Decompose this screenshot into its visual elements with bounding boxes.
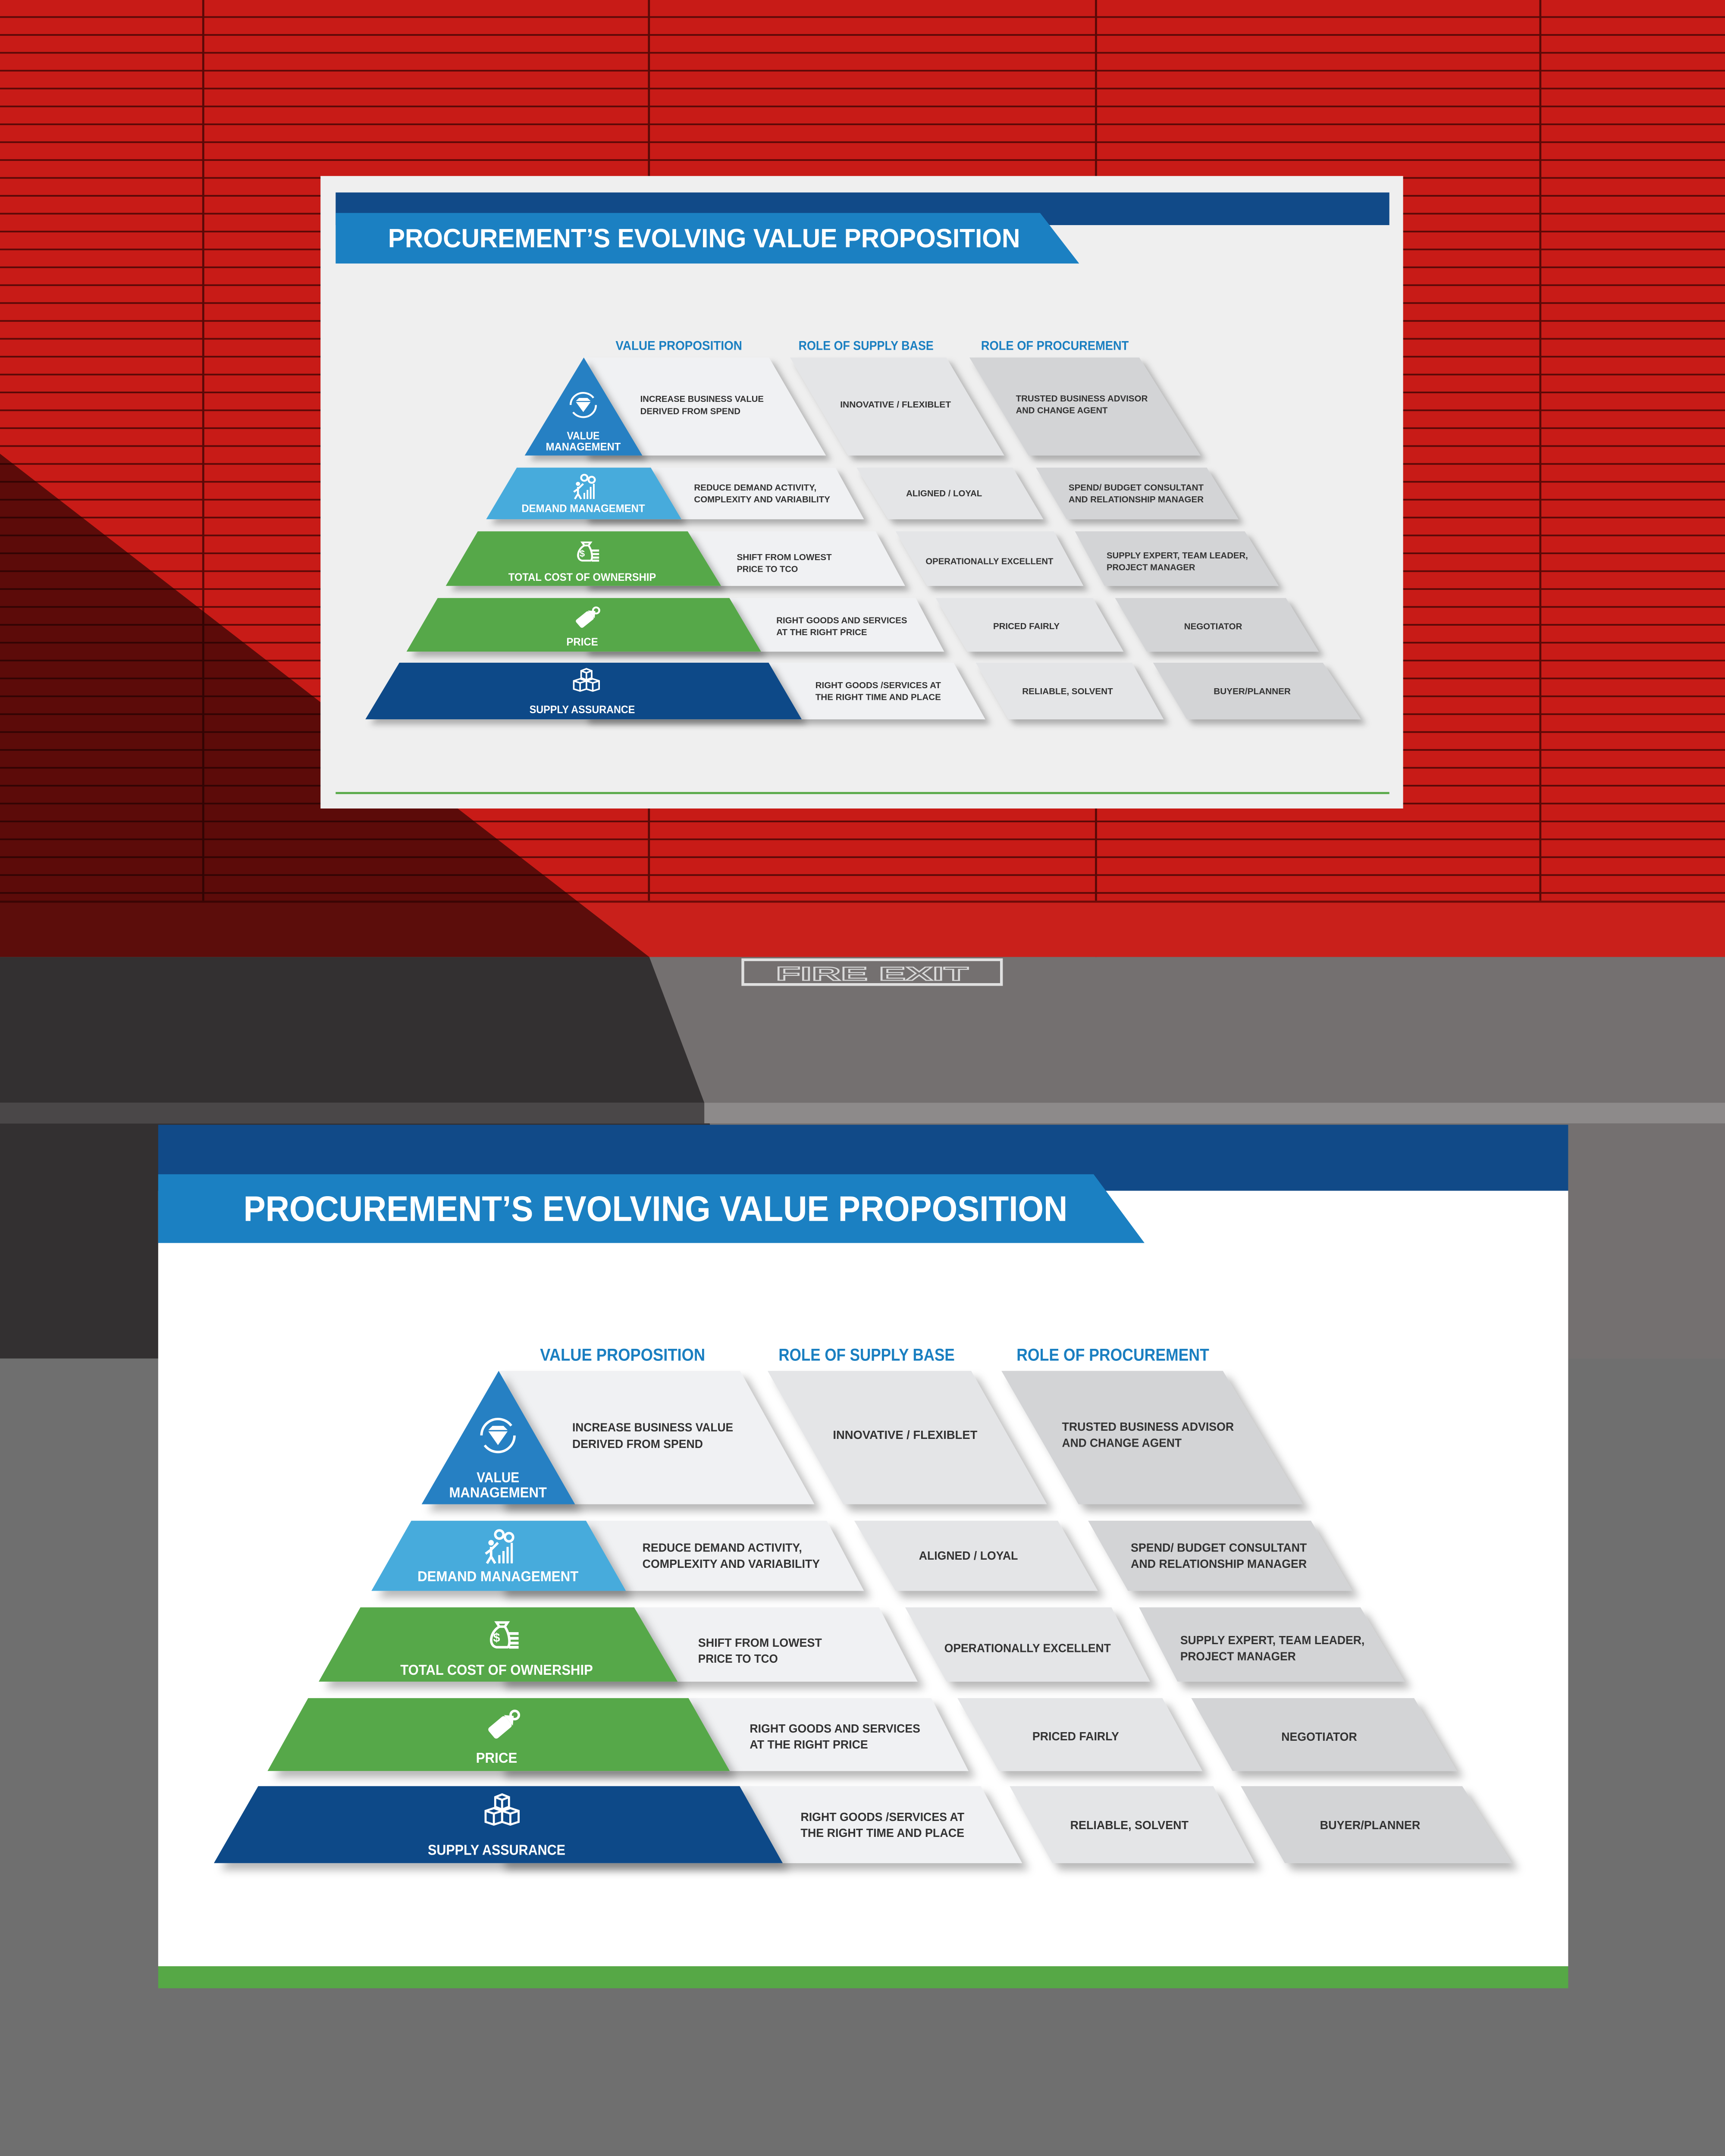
panel texts: ALIGNED / LOYAL	[919, 1549, 1018, 1562]
pyramid labels	[400, 1470, 593, 1858]
column headers: VALUE PROPOSITION	[540, 1345, 705, 1364]
board texts: TRUSTED BUSINESS ADVISOR	[1016, 394, 1148, 404]
board texts	[508, 394, 1291, 716]
icon: boxes	[486, 1794, 519, 1825]
board texts: THE RIGHT TIME AND PLACE	[815, 693, 941, 702]
board texts: BUYER/PLANNER	[1214, 687, 1291, 696]
panel texts: BUYER/PLANNER	[1320, 1818, 1421, 1832]
board texts: OPERATIONALLY EXCELLENT	[925, 557, 1054, 566]
board texts: ALIGNED / LOYAL	[906, 489, 982, 498]
main infographic	[158, 1125, 1568, 1988]
board texts: MANAGEMENT	[546, 441, 621, 453]
panel texts: PRICE TO TCO	[698, 1652, 778, 1665]
panel texts: THE RIGHT TIME AND PLACE	[800, 1826, 964, 1839]
pyramid labels: SUPPLY ASSURANCE	[428, 1843, 565, 1858]
panel texts: REDUCE DEMAND ACTIVITY,	[643, 1541, 802, 1554]
panel texts: NEGOTIATOR	[1281, 1730, 1357, 1743]
icon: money bag and coins: $	[493, 1631, 500, 1645]
panel texts: PRICED FAIRLY	[1032, 1730, 1119, 1743]
wall base strip	[0, 901, 1725, 957]
board column headers: VALUE PROPOSITION	[615, 339, 742, 353]
board texts: PRICED FAIRLY	[993, 621, 1060, 631]
panels: value proposition / supply base / procurement	[498, 1371, 1512, 1863]
icon: value gem	[481, 1419, 514, 1452]
board texts: REDUCE DEMAND ACTIVITY,	[694, 483, 816, 492]
board title band: PROCUREMENT’S EVOLVING VALUE PROPOSITION	[388, 224, 1020, 253]
red wooden wall	[0, 0, 1725, 901]
pyramid icons	[481, 1419, 522, 1825]
white canvas	[158, 1191, 1568, 1966]
pyramid labels: TOTAL COST OF OWNERSHIP	[400, 1662, 593, 1678]
board column headers: ROLE OF SUPPLY BASE	[799, 339, 934, 353]
icon: price tag	[487, 1707, 522, 1740]
board texts: SPEND/ BUDGET CONSULTANT	[1069, 483, 1204, 492]
board green line	[336, 792, 1389, 794]
board texts: DERIVED FROM SPEND	[640, 407, 740, 416]
board texts: PROJECT MANAGER	[1107, 563, 1195, 572]
pyramid labels: MANAGEMENT	[449, 1485, 547, 1501]
board texts: AND RELATIONSHIP MANAGER	[1069, 495, 1204, 505]
panel texts: TRUSTED BUSINESS ADVISOR	[1062, 1420, 1234, 1433]
board icons: $	[580, 548, 585, 559]
board pyramid	[365, 357, 802, 719]
pyramid	[214, 1371, 783, 1863]
panel texts: AT THE RIGHT PRICE	[750, 1738, 868, 1751]
board column headers	[616, 341, 1129, 350]
title band	[158, 1125, 1568, 1243]
column headers: ROLE OF PROCUREMENT	[1016, 1345, 1209, 1364]
panel texts: AND CHANGE AGENT	[1062, 1436, 1182, 1450]
panel texts: INNOVATIVE / FLEXIBLET	[833, 1428, 978, 1442]
pyramid labels: VALUE	[477, 1470, 519, 1485]
panel texts: SHIFT FROM LOWEST	[698, 1636, 822, 1649]
panel texts: AND RELATIONSHIP MANAGER	[1131, 1557, 1307, 1570]
board texts: INCREASE BUSINESS VALUE	[640, 395, 764, 404]
board texts: RIGHT GOODS /SERVICES AT	[815, 681, 941, 690]
mounted board (photo)	[320, 176, 1404, 808]
panel texts: RIGHT GOODS AND SERVICES	[750, 1722, 920, 1735]
column headers: ROLE OF SUPPLY BASE	[778, 1345, 955, 1364]
board icons	[571, 393, 602, 691]
pavement	[0, 957, 1725, 1359]
panel texts: INCREASE BUSINESS VALUE	[572, 1421, 733, 1434]
board texts: COMPLEXITY AND VARIABILITY	[694, 495, 830, 505]
board texts: TOTAL COST OF OWNERSHIP	[508, 572, 656, 583]
board panels	[583, 357, 1361, 719]
panel texts: RIGHT GOODS /SERVICES AT	[800, 1810, 964, 1824]
board texts: RIGHT GOODS AND SERVICES	[776, 616, 907, 625]
board texts: SHIFT FROM LOWEST	[737, 553, 832, 562]
fire exit marking: FIRE EXIT	[776, 964, 969, 985]
panel texts: OPERATIONALLY EXCELLENT	[944, 1641, 1111, 1655]
board texts: PRICE	[566, 636, 598, 648]
gray floor	[0, 1359, 1725, 2156]
panel texts: SUPPLY EXPERT, TEAM LEADER,	[1180, 1633, 1364, 1647]
panel texts: PROJECT MANAGER	[1180, 1649, 1296, 1663]
panel texts: DERIVED FROM SPEND	[572, 1437, 703, 1451]
board texts: AT THE RIGHT PRICE	[776, 627, 867, 637]
board texts: PRICE TO TCO	[737, 564, 798, 574]
board title band	[336, 192, 1389, 264]
board texts: INNOVATIVE / FLEXIBLET	[840, 400, 951, 410]
column headers	[540, 1345, 1209, 1364]
panel texts	[572, 1420, 1421, 1839]
board texts: AND CHANGE AGENT	[1016, 406, 1108, 416]
board texts: SUPPLY ASSURANCE	[530, 704, 635, 716]
fire exit marking	[743, 960, 1001, 985]
pyramid labels: PRICE	[476, 1750, 517, 1766]
pyramid labels: DEMAND MANAGEMENT	[417, 1569, 579, 1585]
footer green bar	[158, 1966, 1568, 1988]
board texts: RELIABLE, SOLVENT	[1022, 687, 1113, 696]
panel texts: SPEND/ BUDGET CONSULTANT	[1131, 1541, 1307, 1554]
board texts: NEGOTIATOR	[1184, 622, 1242, 631]
board texts: DEMAND MANAGEMENT	[521, 503, 645, 515]
panel texts: COMPLEXITY AND VARIABILITY	[643, 1557, 820, 1570]
wall shadow	[0, 454, 649, 957]
board texts: SUPPLY EXPERT, TEAM LEADER,	[1107, 551, 1248, 561]
icon: money bag and coins	[491, 1623, 519, 1647]
panel texts: RELIABLE, SOLVENT	[1070, 1818, 1189, 1832]
icon: demand person with chart	[486, 1530, 513, 1564]
title: PROCUREMENT’S EVOLVING VALUE PROPOSITION	[244, 1189, 1067, 1229]
board column headers: ROLE OF PROCUREMENT	[981, 339, 1129, 353]
board texts: VALUE	[567, 430, 599, 442]
